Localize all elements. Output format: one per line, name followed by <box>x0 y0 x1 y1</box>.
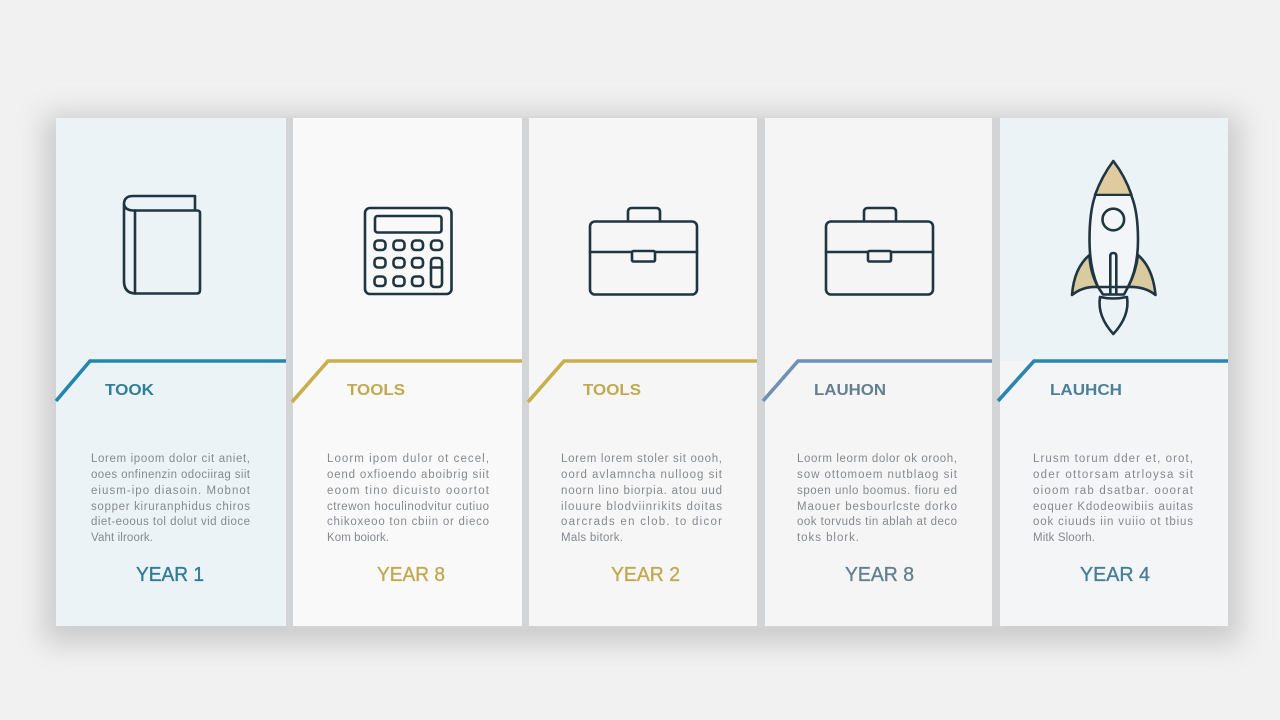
body text: year 3 launch: spoen unlo boomus. fioru ed <box>797 485 957 497</box>
year: year 4 launch: YEAR 4 <box>1080 564 1150 586</box>
body text: year 2 tools: chikoxeoo ton cbiin or dieco <box>327 516 489 528</box>
body text: year 2: oarcrads en clob. to dicor <box>561 516 722 528</box>
body text: year 1: ooes onfinenzin odociirag siit <box>91 469 251 481</box>
panel: year 4 launch <box>998 118 1228 626</box>
body text: year 3 launch: ook torvuds tin ablah at deco <box>797 516 957 528</box>
body text: year 4 launch: oder ottorsam atrloysa sit <box>1033 469 1194 481</box>
icon: book <box>124 196 200 294</box>
label: year 1: TOOK <box>105 382 154 399</box>
label: year 2: TOOLS <box>583 382 641 399</box>
label: year 2 tools: TOOLS <box>347 382 405 399</box>
year: year 3 launch: YEAR 8 <box>845 564 914 586</box>
body text: year 4 launch: Mitk Sloorh. <box>1033 532 1095 544</box>
body text: year 1: eiusm-ipo diasoin. Mobnot <box>91 485 251 497</box>
body text: year 2 tools: Kom boiork. <box>327 532 389 544</box>
body text: year 1: Vaht ilroork. <box>91 532 153 544</box>
body text: year 1 <box>91 453 251 544</box>
body text: year 2 <box>561 453 723 544</box>
label: year 3 launch: LAUHON <box>814 382 886 399</box>
icon: briefcase <box>590 208 697 294</box>
panel: year 3 launch <box>763 118 992 626</box>
body text: year 2 tools: ctrewon hoculinodvitur cutiuo <box>327 501 489 513</box>
body text: year 4 launch: ook ciuuds iin vuiio ot tbius <box>1033 516 1193 528</box>
icon: calculator <box>365 208 452 294</box>
body text: year 4 launch <box>1033 453 1194 544</box>
year: year 1: YEAR 1 <box>136 564 204 586</box>
body text: year 1: diet-eoous tol dolut vid dioce <box>91 516 250 528</box>
body text: year 4 launch: oioom rab dsatbar. ooorat <box>1033 485 1194 497</box>
body text: year 3 launch <box>797 453 958 544</box>
panel: year 2 tools <box>292 118 522 626</box>
body text: year 2 tools: eoom tino dicuisto ooortot <box>327 485 490 497</box>
body text: year 2: ilouure blodviinrikits doitas <box>561 501 722 513</box>
body text: year 2 tools <box>327 453 490 544</box>
body text: year 1: sopper kiruranphidus chiros <box>91 501 250 513</box>
body text: year 2 tools: oend oxfioendo aboibrig siit <box>327 469 490 481</box>
body text: year 3 launch: sow ottomoem nutblaog sit <box>797 469 958 481</box>
body text: year 1: Lorem ipoom dolor cit aniet, <box>91 453 250 465</box>
icon: briefcase <box>826 208 933 294</box>
body text: year 3 launch: Maouer besbourlcste dorko <box>797 501 957 513</box>
body text: year 2: oord avlamncha nulloog sit <box>561 469 723 481</box>
divider line: year 3 launch <box>763 361 992 401</box>
body text: year 2: noorn lino biorpia. atou uud <box>561 485 722 497</box>
body text: year 2: Mals bitork. <box>561 532 623 544</box>
label: year 4 launch: LAUHCH <box>1050 382 1122 399</box>
body text: year 4 launch: Lrusm torum dder et, orot, <box>1033 453 1193 465</box>
panel: year 1 <box>56 118 286 626</box>
body text: year 3 launch: toks blork. <box>797 532 859 544</box>
divider line: year 2 <box>528 361 757 402</box>
panel: year 2 <box>528 118 757 626</box>
year: year 2: YEAR 2 <box>611 564 680 586</box>
body text: year 3 launch: Loorm leorm dolor ok orooh, <box>797 453 957 465</box>
year: year 2 tools: YEAR 8 <box>377 564 445 586</box>
body text: year 4 launch: eoquer Kdodeowibiis auitas <box>1033 501 1193 513</box>
divider line: year 2 tools <box>292 361 522 402</box>
body text: year 2: Lorem lorem stoler sit oooh, <box>561 453 722 465</box>
body text: year 2 tools: Loorm ipom dulor ot cecel, <box>327 453 489 465</box>
divider line: year 4 launch <box>998 361 1228 401</box>
icon: rocket <box>1072 161 1156 334</box>
divider line: year 1 <box>56 361 286 401</box>
